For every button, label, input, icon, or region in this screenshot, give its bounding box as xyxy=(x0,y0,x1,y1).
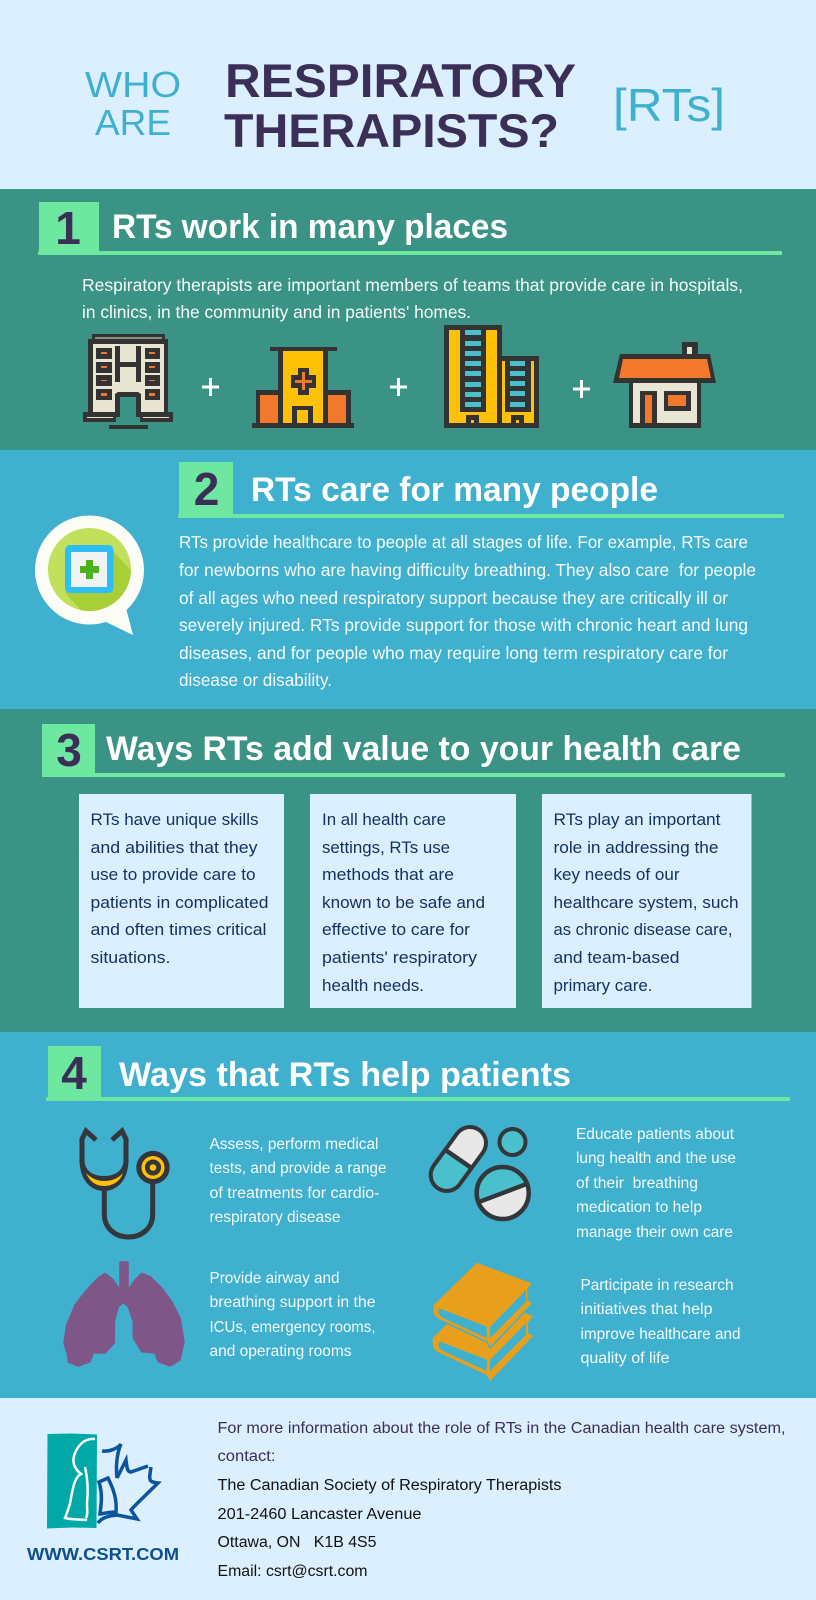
text: educate: manage their own care xyxy=(576,1224,733,1241)
heading 3: 3 xyxy=(56,724,82,776)
card 2: patients' respiratory xyxy=(322,948,478,967)
text: places description: in clinics, in the community and in patients' homes. xyxy=(82,302,471,322)
card 1: situations. xyxy=(90,948,170,967)
title: who are: WHO xyxy=(85,64,181,105)
card 2 xyxy=(310,794,516,1008)
card 1: and often times critical xyxy=(90,920,266,939)
text: assess: tests, and provide a range xyxy=(210,1160,386,1177)
heading 2 xyxy=(178,462,784,518)
title: who are: ARE xyxy=(95,102,171,143)
text: contact information: For more information about the role of RTs in the Canadian health care system, xyxy=(218,1420,786,1437)
title: who are xyxy=(85,64,181,143)
card 3: key needs of our xyxy=(554,865,680,884)
panel: section 4 ways RTs help patients xyxy=(0,1032,816,1398)
card 2: known to be safe and xyxy=(322,893,485,912)
heading 2: RTs care for many people xyxy=(251,471,658,509)
text: airway: and operating rooms xyxy=(210,1343,352,1360)
card 2: methods that are xyxy=(322,865,454,884)
text: care description xyxy=(179,532,756,690)
text: assess: Assess, perform medical xyxy=(210,1136,378,1153)
heading 4 xyxy=(46,1046,790,1101)
text: contact information: Ottawa, ON K1B 4S5 xyxy=(218,1534,376,1551)
card 3: role in addressing the xyxy=(554,838,718,857)
text: educate: of their breathing xyxy=(576,1175,698,1192)
text: contact information: The Canadian Society of Respiratory Therapists xyxy=(218,1477,562,1494)
icon: stethoscope xyxy=(80,1131,170,1237)
icon: office towers xyxy=(444,325,539,428)
text: research xyxy=(580,1277,740,1367)
text: educate xyxy=(576,1126,736,1241)
title: respiratory therapists xyxy=(224,54,576,157)
heading 1: 1 xyxy=(55,202,81,254)
text: airway: ICUs, emergency rooms, xyxy=(210,1319,376,1336)
text: educate: medication to help xyxy=(576,1199,702,1216)
text: airway xyxy=(210,1270,376,1360)
heading 4: Ways that RTs help patients xyxy=(119,1056,571,1094)
icon: plus 2 xyxy=(390,378,407,396)
text: research: Participate in research xyxy=(580,1277,734,1294)
title: respiratory therapists: THERAPISTS? xyxy=(224,104,559,157)
icon: house xyxy=(613,342,716,428)
heading 3 xyxy=(42,724,785,777)
text: assess: of treatments for cardio- xyxy=(210,1185,380,1202)
title: respiratory therapists: RESPIRATORY xyxy=(225,54,576,107)
text: contact information xyxy=(218,1420,786,1580)
card 3: primary care. xyxy=(554,976,652,995)
card 1: and abilities that they xyxy=(90,838,258,857)
logo: CSRT: WWW.CSRT.COM xyxy=(27,1544,179,1564)
card 1 xyxy=(79,794,284,1008)
icon: books xyxy=(433,1262,533,1381)
text: airway: breathing support in the xyxy=(210,1294,376,1311)
text: assess: respiratory disease xyxy=(210,1209,340,1226)
text: care description: RTs provide healthcare to people at all stages of life. For example, RTs care xyxy=(179,532,748,552)
card 2: effective to care for xyxy=(322,920,470,939)
logo: CSRT xyxy=(27,1434,179,1564)
text: care description: for newborns who are having difficulty breathing. They also care for people xyxy=(179,560,756,580)
text: contact information: contact: xyxy=(218,1448,276,1465)
header panel xyxy=(0,0,816,189)
text: research: initiatives that help xyxy=(580,1301,712,1318)
card 2: health needs. xyxy=(322,976,424,995)
card 1: use to provide care to xyxy=(90,865,256,884)
text: research: quality of life xyxy=(580,1350,670,1367)
text: care description: diseases, and for people who may require long term respiratory care for xyxy=(179,643,728,663)
heading 2: 2 xyxy=(194,463,219,515)
icon: lungs xyxy=(64,1262,184,1366)
icon: medical speech bubble xyxy=(35,516,144,635)
card 1: patients in complicated xyxy=(90,893,268,912)
heading 1: RTs work in many places xyxy=(112,208,508,246)
card 3: RTs play an important xyxy=(554,810,721,829)
heading 1 xyxy=(38,202,782,255)
text: care description: severely injured. RTs provide support for those with chronic heart and lung xyxy=(179,615,748,635)
text: care description: disease or disability. xyxy=(179,670,332,690)
text: research: improve healthcare and xyxy=(580,1326,740,1343)
text: assess xyxy=(210,1136,386,1226)
card 3: as chronic disease care, xyxy=(554,920,732,939)
panel: footer xyxy=(0,1398,816,1600)
text: airway: Provide airway and xyxy=(210,1270,340,1287)
card 1: RTs have unique skills xyxy=(90,810,258,829)
text: contact information: 201-2460 Lancaster Avenue xyxy=(218,1506,422,1523)
card 2: In all health care xyxy=(322,810,446,829)
title: RTs abbreviation: [RTs] xyxy=(613,79,725,131)
text: educate: lung health and the use xyxy=(576,1150,736,1167)
card 3: healthcare system, such xyxy=(554,893,738,912)
card 3 xyxy=(542,794,752,1008)
icon: plus 1 xyxy=(202,378,219,396)
panel: section 1 RTs work in many places xyxy=(0,189,816,450)
text: care description: of all ages who need respiratory support because they are critically ill or xyxy=(179,588,728,608)
heading 3: Ways RTs add value to your health care xyxy=(106,730,741,768)
text: places description: Respiratory therapists are important members of teams that provide care in hospitals, xyxy=(82,275,743,295)
card 3: and team-based xyxy=(554,948,680,967)
icon: hospital xyxy=(83,334,173,429)
card 2: settings, RTs use xyxy=(322,838,450,857)
icon: clinic xyxy=(252,347,354,428)
panel: section 2 RTs care for many people xyxy=(0,450,816,709)
panel: section 3 ways RTs add value xyxy=(0,709,816,1032)
icon: pills xyxy=(433,1129,529,1219)
heading 4: 4 xyxy=(61,1047,87,1099)
text: places description xyxy=(82,275,743,322)
text: educate: Educate patients about xyxy=(576,1126,735,1143)
icon: plus 3 xyxy=(573,380,590,398)
text: contact information: Email: csrt@csrt.com xyxy=(218,1563,368,1580)
